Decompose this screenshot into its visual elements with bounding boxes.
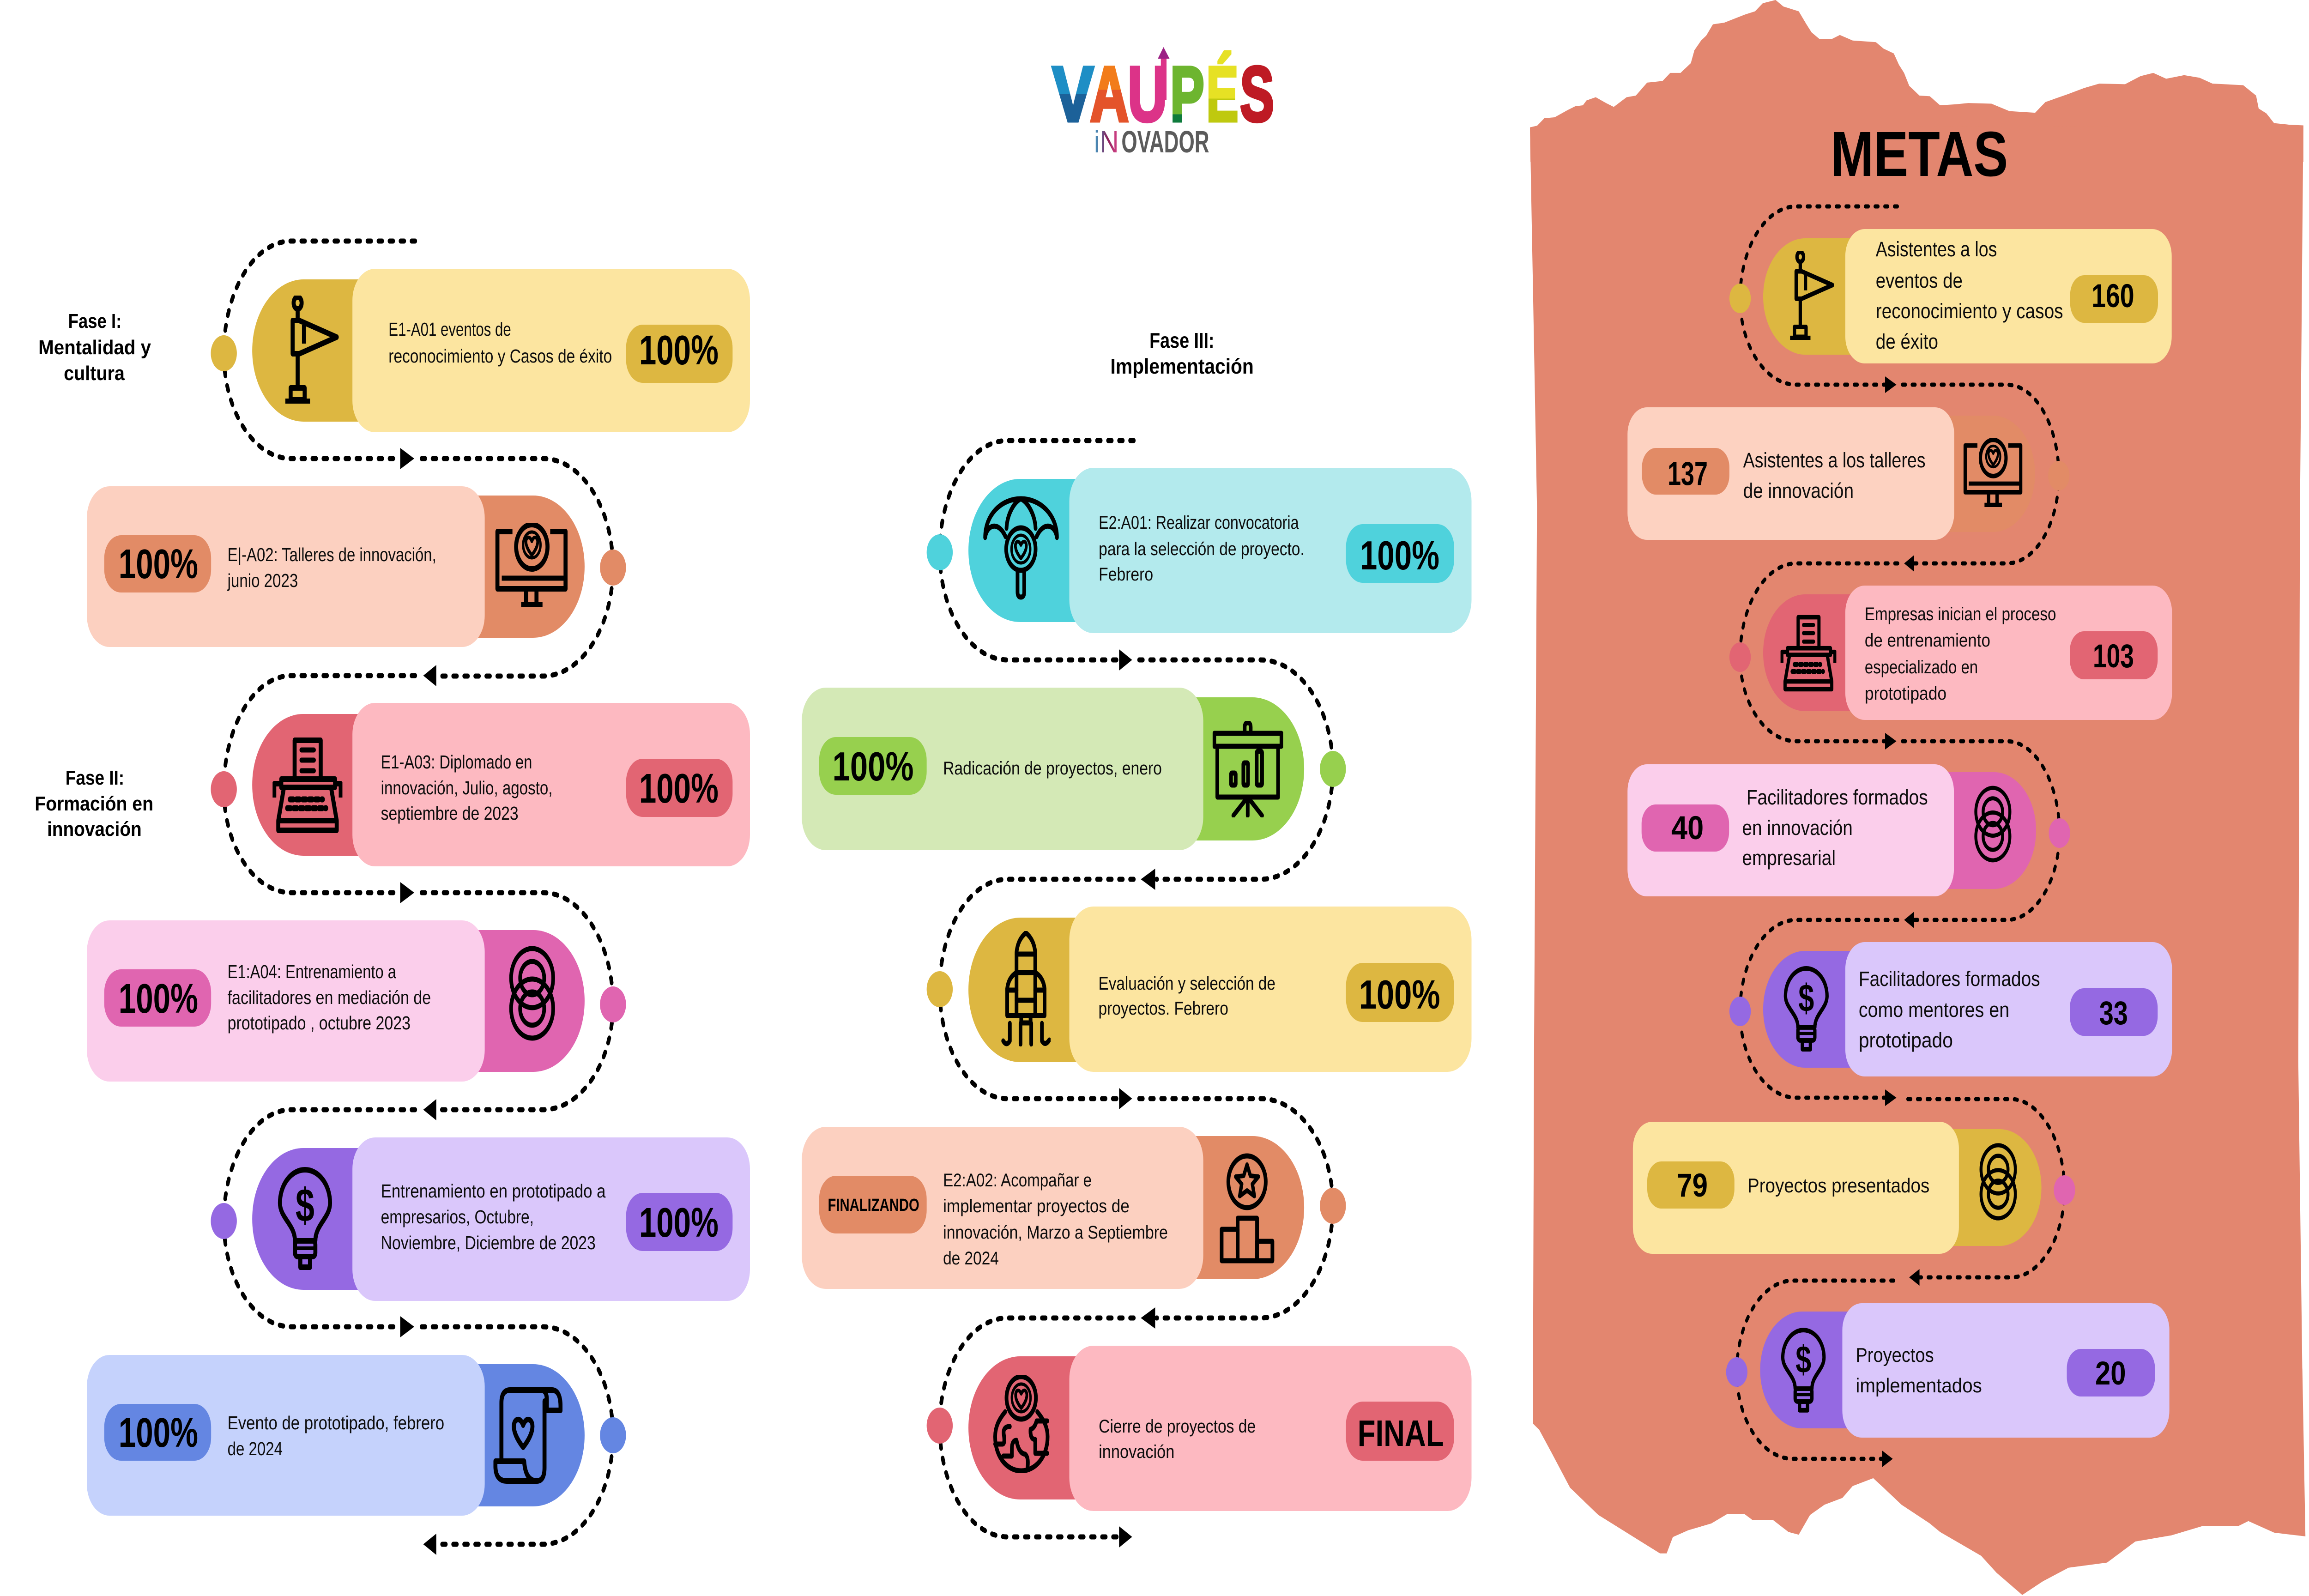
badge 79: 79	[1677, 1167, 1708, 1204]
status dot	[600, 986, 626, 1022]
badge 20: 20	[2095, 1355, 2126, 1392]
description	[381, 751, 552, 824]
description: Radicación de proyectos, enero	[943, 758, 1162, 779]
badge 100%: 100%	[639, 765, 719, 811]
badge 100%	[819, 737, 927, 795]
dashed connector with arrows: metas	[1737, 206, 2064, 1467]
description: septiembre de 2023	[381, 803, 519, 824]
step 9: evaluación y selección	[927, 907, 1471, 1072]
status dot	[1726, 1357, 1747, 1387]
card	[1070, 468, 1471, 633]
icon tab	[1901, 772, 2036, 889]
description: Proyectos	[1856, 1344, 1934, 1366]
title: METAS: METAS	[1831, 118, 2008, 190]
status dot	[211, 335, 237, 371]
badge FINAL: FINAL	[1358, 1413, 1444, 1454]
description	[1856, 1344, 1982, 1397]
badge 100%: 100%	[119, 1409, 198, 1456]
meta 4: facilitadores en innovación	[1627, 764, 2070, 896]
dashed connector with arrows: left column	[224, 241, 613, 1555]
icon tab	[417, 1364, 585, 1506]
description: Facilitadores formados	[1859, 967, 2040, 991]
heading: Fase II	[35, 767, 153, 840]
logo: Vaupés Innovador: V	[1052, 51, 1094, 138]
icon: medal and podium	[1221, 1156, 1272, 1261]
description	[1865, 604, 2056, 704]
heading: Fase I: Mentalidad y	[38, 336, 151, 359]
description: reconocimiento y casos	[1876, 300, 2063, 323]
badge 33: 33	[2099, 995, 2128, 1032]
icon tab	[1137, 697, 1304, 840]
icon: scroll	[496, 1390, 561, 1481]
description	[388, 319, 612, 367]
icon tab	[1763, 594, 1897, 711]
heading: Fase I: Fase I:	[68, 310, 121, 332]
description: Asistentes a los	[1876, 238, 1997, 261]
heading: Fase III: Implementación	[1111, 355, 1254, 378]
card	[802, 688, 1203, 850]
step 2: E|-A02 talleres	[87, 486, 626, 647]
badge 100%	[626, 759, 732, 817]
description	[228, 961, 431, 1034]
description: de 2024	[943, 1248, 999, 1269]
icon tab	[1901, 416, 2035, 532]
logo: Vaupés Innovador: É	[1206, 51, 1239, 138]
description: Entrenamiento en prototipado a	[381, 1180, 606, 1202]
description	[1098, 973, 1275, 1019]
badge 103: 103	[2093, 638, 2134, 675]
panel: metas torn paper background	[1530, 0, 2305, 1595]
meta 2: asistentes a talleres	[1627, 407, 2069, 540]
icon tab	[968, 918, 1136, 1062]
badge 100%: 100%	[119, 541, 198, 587]
description: Empresas inician el proceso	[1865, 604, 2056, 624]
card	[87, 1355, 485, 1516]
icon tab	[417, 496, 585, 638]
icon tab	[252, 279, 419, 422]
description: Asistentes a los talleres	[1743, 449, 1926, 472]
description: junio 2023	[227, 570, 298, 591]
card	[1845, 586, 2172, 720]
icon tab	[417, 930, 585, 1072]
icon tab	[1763, 951, 1897, 1068]
description: de entrenamiento	[1865, 630, 1990, 651]
icon tab	[968, 1356, 1136, 1499]
badge 100%	[104, 535, 211, 592]
description: eventos de	[1876, 269, 1963, 292]
badge 160	[2070, 275, 2158, 323]
card	[352, 269, 750, 432]
description: implementar proyectos de	[943, 1196, 1130, 1216]
description: en innovación	[1742, 816, 1853, 840]
logo: Vaupés Innovador: iN	[1094, 125, 1119, 159]
badge 100%: 100%	[119, 975, 198, 1022]
status dot	[927, 534, 953, 570]
card	[802, 1127, 1203, 1289]
badge 100%	[626, 325, 732, 383]
step 8: radicación de proyectos	[802, 688, 1346, 850]
description: implementados	[1856, 1374, 1982, 1397]
badge 103	[2070, 631, 2158, 679]
meta 6: proyectos presentados	[1633, 1122, 2075, 1254]
description	[1099, 1416, 1256, 1462]
description: E1-A01 eventos de	[388, 319, 511, 340]
status dot	[600, 1417, 626, 1453]
badge 20	[2067, 1349, 2155, 1396]
icon tab	[1760, 1312, 1894, 1428]
description	[227, 544, 436, 591]
icon tab	[1763, 238, 1897, 355]
description	[228, 1412, 444, 1459]
status dot	[1729, 997, 1751, 1026]
description: E2:A02: Acompañar e	[943, 1170, 1092, 1191]
heading: Fase II: Fase II:	[66, 767, 124, 789]
badge FINAL	[1346, 1402, 1454, 1461]
status dot	[2054, 1175, 2075, 1205]
step 3: E1-A03 diplomado	[211, 703, 750, 866]
dashed connector with arrows: middle column	[940, 441, 1333, 1548]
icon tab	[1904, 1129, 2042, 1246]
description	[943, 1170, 1168, 1269]
status dot	[2049, 818, 2070, 848]
badge 100%	[104, 969, 211, 1027]
card	[1070, 1346, 1471, 1511]
icon: monitor	[1965, 440, 2021, 505]
step 5: entrenamiento en prototipado	[211, 1137, 750, 1301]
badge 100%	[104, 1404, 211, 1461]
icon: light bulb	[280, 1170, 330, 1267]
icon: light bulb	[1785, 968, 1827, 1049]
meta 5: facilitadores mentores	[1729, 942, 2172, 1076]
badge 79	[1647, 1161, 1735, 1209]
status dot	[927, 971, 953, 1007]
description: prototipado , octubre 2023	[228, 1012, 411, 1034]
badge 40	[1642, 804, 1729, 852]
card	[87, 486, 485, 647]
description	[1876, 238, 2063, 353]
badge 137	[1642, 448, 1729, 495]
description: Febrero	[1099, 564, 1153, 585]
icon: light bulb	[1783, 1330, 1824, 1410]
card	[352, 1137, 750, 1301]
icon: rings	[511, 949, 553, 1038]
logo: Vaupés Innovador: A	[1090, 51, 1129, 138]
badge 100%	[626, 1193, 732, 1251]
step 1: E1-A01 eventos	[211, 269, 750, 432]
meta 3: empresas en entrenamiento	[1729, 586, 2172, 720]
card	[1070, 907, 1471, 1072]
icon: typewriter	[274, 740, 341, 830]
icon: rings	[1981, 1145, 2015, 1218]
heading: Fase I: cultura	[64, 362, 125, 385]
heading: Fase II: Formación en	[35, 792, 153, 815]
logo: Vaupés Innovador: S	[1240, 51, 1274, 138]
card	[1845, 229, 2172, 363]
description: innovación	[1099, 1441, 1174, 1462]
description: E2:A01: Realizar convocatoria	[1099, 512, 1299, 533]
logo: Vaupés Innovador: P	[1170, 51, 1204, 138]
description: de 2024	[228, 1438, 283, 1459]
icon: flag	[1790, 252, 1832, 338]
description: reconocimiento y Casos de éxito	[388, 345, 612, 367]
description: E1:A04: Entrenamiento a	[228, 961, 396, 982]
description: E1-A03: Diplomado en	[381, 751, 532, 773]
badge 160: 160	[2091, 278, 2134, 314]
description: de innovación	[1743, 479, 1854, 502]
badge FINALIZANDO	[819, 1176, 927, 1233]
description	[1743, 449, 1926, 502]
description: especializado en	[1865, 657, 1978, 677]
badge 100%: 100%	[639, 1199, 719, 1245]
card	[1633, 1122, 1959, 1254]
card	[1845, 942, 2172, 1076]
description: de éxito	[1876, 330, 1938, 353]
badge 100%: 100%	[639, 327, 719, 373]
description: facilitadores en mediación de	[228, 987, 431, 1008]
card	[352, 703, 750, 866]
status dot	[211, 1203, 237, 1239]
description	[1859, 967, 2040, 1052]
description: como mentores en	[1859, 998, 2009, 1022]
status dot	[211, 771, 237, 807]
icon: flag	[285, 297, 337, 401]
step 4: E1:A04 entrenamiento	[87, 920, 626, 1082]
description: Evento de prototipado, febrero	[228, 1412, 444, 1433]
badge 100%: 100%	[1360, 533, 1439, 578]
icon tab	[252, 714, 419, 856]
icon tab	[1137, 1136, 1304, 1279]
description: proyectos. Febrero	[1098, 998, 1228, 1019]
description: empresarial	[1742, 846, 1836, 870]
step 7: E2:A01 convocatoria	[927, 468, 1471, 633]
status dot	[927, 1408, 953, 1444]
step 10: E2:A02 acompañar	[802, 1127, 1346, 1289]
heading: Fase I	[38, 310, 151, 385]
description: para la selección de proyecto.	[1099, 538, 1305, 559]
description: Facilitadores formados	[1747, 786, 1928, 809]
icon: typewriter	[1782, 617, 1835, 689]
status dot	[2048, 461, 2069, 490]
status dot	[600, 550, 626, 586]
description: Evaluación y selección de	[1098, 973, 1275, 994]
badge 40: 40	[1671, 810, 1704, 846]
description: Cierre de proyectos de	[1099, 1416, 1256, 1437]
description	[1099, 512, 1305, 585]
description: innovación, Marzo a Septiembre	[943, 1222, 1168, 1243]
status dot	[1320, 751, 1346, 787]
description: innovación, Julio, agosto,	[381, 777, 552, 798]
description: Noviembre, Diciembre de 2023	[381, 1232, 596, 1253]
badge 100%	[1346, 524, 1454, 583]
status dot	[1729, 284, 1751, 313]
icon tab	[252, 1148, 419, 1290]
card	[1627, 764, 1954, 896]
card	[1627, 407, 1954, 540]
description	[1742, 786, 1928, 870]
icon: presentation board	[1214, 723, 1281, 816]
meta 7: proyectos implementados	[1726, 1303, 2170, 1438]
badge FINALIZANDO: FINALIZANDO	[828, 1196, 919, 1215]
status dot	[1729, 642, 1751, 672]
logo: Vaupés Innovador: OVADOR	[1121, 125, 1209, 159]
meta 1: asistentes a eventos	[1729, 229, 2172, 363]
card	[87, 920, 485, 1082]
icon: rocket	[1003, 933, 1049, 1044]
card	[1842, 1303, 2170, 1438]
description: E|-A02: Talleres de innovación,	[228, 544, 436, 565]
description: empresarios, Octubre,	[381, 1206, 534, 1227]
icon tab	[968, 479, 1136, 622]
icon: umbrella	[985, 499, 1057, 597]
badge 33	[2070, 988, 2158, 1036]
step 6: evento de prototipado	[87, 1355, 626, 1516]
badge 100%: 100%	[1359, 972, 1440, 1017]
badge 137: 137	[1668, 456, 1708, 492]
heading: Fase II: innovación	[47, 818, 142, 840]
description: Proyectos presentados	[1747, 1174, 1929, 1197]
status dot	[1320, 1188, 1346, 1224]
description	[381, 1180, 606, 1253]
description: prototipado	[1859, 1029, 1953, 1052]
icon: globe with heart	[995, 1377, 1048, 1471]
icon: monitor	[497, 525, 566, 605]
heading: Fase III: Fase III:	[1149, 329, 1214, 352]
step 11: cierre de proyectos	[927, 1346, 1471, 1511]
badge 100%	[1346, 963, 1454, 1022]
description: prototipado	[1865, 683, 1946, 704]
badge 100%: 100%	[833, 744, 913, 789]
logo: Vaupés Innovador: U	[1128, 51, 1167, 138]
logo: Vaupés Innovador	[1052, 47, 1274, 159]
heading: Fase III	[1111, 329, 1254, 378]
icon: rings	[1976, 788, 2010, 860]
